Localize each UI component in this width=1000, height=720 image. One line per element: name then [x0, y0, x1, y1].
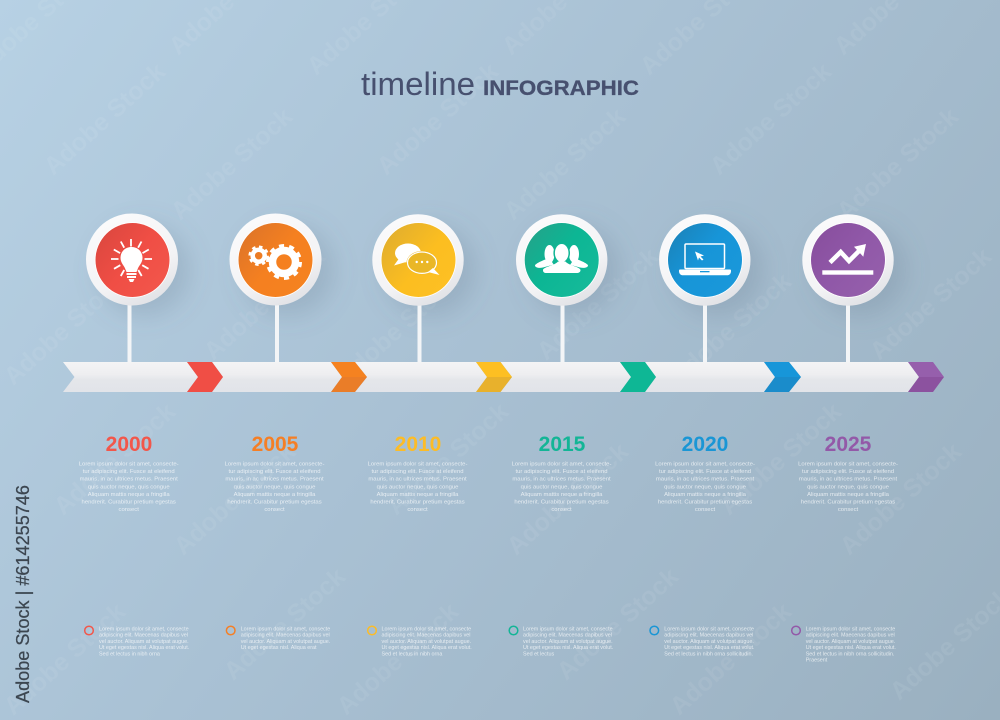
text: Adobe Stock — [502, 437, 634, 561]
text: Adobe Stock — [382, 397, 514, 521]
icon: rising chart — [822, 244, 873, 275]
year 2005 text block: consect — [264, 507, 285, 513]
icon: light bulb — [111, 239, 152, 282]
year 2015 text block: quis auctor neque, quis congue — [521, 484, 603, 490]
year 2020 text block: tur adipiscing elit. Fusce at eleifend — [659, 469, 751, 475]
note 3 — [368, 626, 472, 657]
year 2005 text block: Lorem ipsum dolor sit amet, consecte- — [225, 462, 324, 468]
milestone 2025 — [802, 214, 906, 362]
year 2015 text block: Aliquam mattis neque a fringilla — [521, 492, 603, 498]
milestone 2020 — [659, 214, 763, 362]
text: Adobe Stock — [0, 267, 131, 391]
year 2005 text block: Aliquam mattis neque a fringilla — [234, 492, 316, 498]
year 2020 text block: Aliquam mattis neque a fringilla — [664, 492, 747, 498]
vertical stock id label: Adobe Stock | #614255746 — [12, 485, 33, 703]
timeline arrow bar — [63, 362, 944, 392]
note 1: Lorem ipsum dolor sit amet, consecte — [99, 626, 189, 632]
note 3: Lorem ipsum dolor sit amet, consecte — [382, 626, 471, 632]
year 2005 text block: 2005 — [252, 433, 299, 456]
text: Adobe Stock — [0, 597, 131, 720]
year 2000 text block: mauris, in ac ultrices metus. Praesent — [80, 477, 178, 483]
year 2025 text block: hendrerit. Curabitur pretium egestas — [801, 500, 895, 506]
title: INFOGRAPHIC — [483, 76, 639, 100]
year 2015 text block: hendrerit. Curabitur pretium egestas — [514, 500, 609, 506]
note 6: Praesent — [806, 658, 828, 664]
icon: laptop — [679, 244, 731, 275]
note 1: vel auctor. Aliquam at volutpat augue. — [99, 639, 189, 645]
icon: gears — [250, 246, 300, 278]
text: Adobe Stock — [665, 597, 797, 720]
year 2000 text block: consect — [119, 507, 139, 513]
year 2000 text block: hendrerit. Curabitur pretium egestas — [82, 500, 176, 506]
year 2010 text block: quis auctor neque, quis congue — [377, 484, 459, 490]
year 2000 text block: quis auctor neque, quis congue — [88, 484, 170, 490]
text: Adobe Stock — [199, 242, 331, 366]
note 6: Lorem ipsum dolor sit amet, consecte — [806, 626, 895, 632]
milestone 2015 — [516, 214, 620, 362]
note 4: adipiscing elit. Maecenas dapibus vel — [523, 633, 612, 639]
note 5: adipiscing elit. Maecenas dapibus vel — [664, 633, 753, 639]
text: Adobe Stock — [832, 102, 964, 226]
note 4: vel auctor. Aliquam at volutpat augue. — [523, 639, 613, 645]
note 6: vel auctor. Aliquam at volutpat augue. — [806, 639, 895, 645]
year 2000 text block: 2000 — [106, 433, 152, 456]
icon: group of people — [535, 242, 588, 273]
note 5: Ut eget egestas nisl. Aliqua erat volut. — [664, 645, 755, 651]
year 2015 text block: 2015 — [539, 433, 586, 456]
note 2: Ut eget egestas nisl. Aliqua erat — [241, 645, 317, 651]
text: Adobe Stock — [835, 437, 967, 561]
year 2020 text block: 2020 — [682, 433, 728, 456]
text: Adobe Stock — [665, 267, 797, 391]
note 6: Sed et lectus in nibh orna sollicitudin. — [806, 651, 894, 657]
note 2: vel auctor. Aliquam at volutpat augue. — [241, 639, 330, 645]
year 2020 text block: consect — [695, 507, 716, 513]
text: Adobe Stock — [169, 437, 301, 561]
year 2005 text block: hendrerit. Curabitur pretium egestas — [227, 500, 322, 506]
text: Adobe Stock — [166, 102, 298, 226]
year 2010 text block: consect — [407, 507, 428, 513]
note 5: Sed et lectus in nibh orna sollicitudin. — [664, 651, 753, 657]
text: Adobe Stock — [865, 242, 997, 366]
chevron: green — [620, 362, 656, 392]
note 6: adipiscing elit. Maecenas dapibus vel — [806, 633, 895, 639]
text: Adobe Stock — [372, 57, 504, 181]
year 2010 text block: hendrerit. Curabitur pretium egestas — [370, 500, 465, 506]
year 2015 text block: Lorem ipsum dolor sit amet, consecte- — [512, 462, 611, 468]
note 1: adipiscing elit. Maecenas dapibus vel — [99, 633, 188, 639]
year 2020 text block: quis auctor neque, quis congue — [664, 484, 747, 490]
year 2020 text block — [655, 433, 755, 513]
year 2025 text block — [798, 433, 898, 513]
year 2010 text block: 2010 — [395, 433, 441, 456]
chevron: red — [187, 362, 223, 392]
year 2000 text block: Lorem ipsum dolor sit amet, consecte- — [79, 462, 179, 468]
year 2025 text block: tur adipiscing elit. Fusce at eleifend — [802, 469, 894, 475]
chevron: yellow — [476, 362, 512, 392]
note 1: Sed et lectus in nibh orna — [99, 651, 160, 657]
note 5: vel auctor. Aliquam at volutpat augue. — [664, 639, 754, 645]
text: Adobe Stock — [39, 57, 171, 181]
text: Adobe Stock — [532, 242, 664, 366]
year 2015 text block: tur adipiscing elit. Fusce at eleifend — [515, 469, 608, 475]
text: Adobe Stock — [499, 102, 631, 226]
year 2000 text block: Aliquam mattis neque a fringilla — [88, 492, 170, 498]
note 5 — [650, 626, 755, 657]
text: Adobe Stock — [332, 267, 464, 391]
milestone 2005 — [230, 214, 334, 362]
note 4: Sed et lectus — [523, 651, 554, 657]
text: Adobe Stock — [332, 597, 464, 720]
note 2: Lorem ipsum dolor sit amet, consecte — [241, 626, 330, 632]
note 3: Sed et lectus in nibh orna — [382, 651, 442, 657]
title: timeline — [361, 66, 475, 102]
year 2025 text block: 2025 — [825, 433, 872, 456]
milestone 2000 — [86, 214, 190, 362]
note 4 — [509, 626, 613, 657]
year 2005 text block: quis auctor neque, quis congue — [234, 484, 316, 490]
year 2025 text block: quis auctor neque, quis congue — [807, 484, 890, 490]
note 3: Ut eget egestas nisl. Aliqua erat volut. — [382, 645, 472, 651]
year 2020 text block: hendrerit. Curabitur pretium egestas — [658, 500, 752, 506]
title — [361, 66, 639, 102]
note 6 — [792, 626, 896, 664]
year 2015 text block: consect — [551, 507, 572, 513]
note 1: Ut eget egestas nisl. Aliqua erat volut. — [99, 645, 189, 651]
icon: chat bubbles — [394, 244, 440, 275]
year 2005 text block — [225, 433, 324, 513]
year 2000 text block — [79, 433, 179, 513]
year 2010 text block: Aliquam mattis neque a fringilla — [377, 492, 459, 498]
text: Adobe Stock — [705, 57, 837, 181]
year 2025 text block: mauris, in ac ultrices metus. Praesent — [799, 477, 897, 483]
year 2025 text block: consect — [838, 507, 859, 513]
note 5: Lorem ipsum dolor sit amet, consecte — [664, 626, 754, 632]
year 2010 text block: mauris, in ac ultrices metus. Praesent — [368, 477, 467, 483]
year 2010 text block: tur adipiscing elit. Fusce at eleifend — [371, 469, 464, 475]
note 4: Ut eget egestas nisl. Aliqua erat volut. — [523, 645, 613, 651]
year 2010 text block: Lorem ipsum dolor sit amet, consecte- — [368, 462, 467, 468]
note 6: Ut eget egestas nisl. Aliqua erat volut. — [806, 645, 896, 651]
year 2000 text block: tur adipiscing elit. Fusce at eleifend — [83, 469, 175, 475]
note 2: adipiscing elit. Maecenas dapibus vel — [241, 633, 330, 639]
year 2025 text block: Aliquam mattis neque a fringilla — [807, 492, 890, 498]
note 2 — [226, 626, 330, 651]
note 1 — [85, 626, 189, 657]
chevron: purple — [908, 362, 944, 392]
chevron: orange — [331, 362, 367, 392]
note 3: vel auctor. Aliquam at volutpat augue. — [382, 639, 471, 645]
note 4: Lorem ipsum dolor sit amet, consecte — [523, 626, 613, 632]
year 2005 text block: tur adipiscing elit. Fusce at eleifend — [228, 469, 321, 475]
year 2025 text block: Lorem ipsum dolor sit amet, consecte- — [798, 462, 898, 468]
year 2015 text block — [512, 433, 611, 513]
chevron: blue — [764, 362, 801, 392]
year 2005 text block: mauris, in ac ultrices metus. Praesent — [225, 477, 324, 483]
text: Adobe Stock — [552, 562, 684, 686]
text: Adobe Stock — [715, 397, 847, 521]
milestone 2010 — [372, 214, 476, 362]
text: Adobe Stock — [219, 562, 351, 686]
year 2020 text block: mauris, in ac ultrices metus. Praesent — [656, 477, 754, 483]
year 2015 text block: mauris, in ac ultrices metus. Praesent — [512, 477, 611, 483]
year 2010 text block — [368, 433, 467, 513]
year 2020 text block: Lorem ipsum dolor sit amet, consecte- — [655, 462, 755, 468]
note 3: adipiscing elit. Maecenas dapibus vel — [382, 633, 470, 639]
text: Adobe Stock — [49, 397, 181, 521]
